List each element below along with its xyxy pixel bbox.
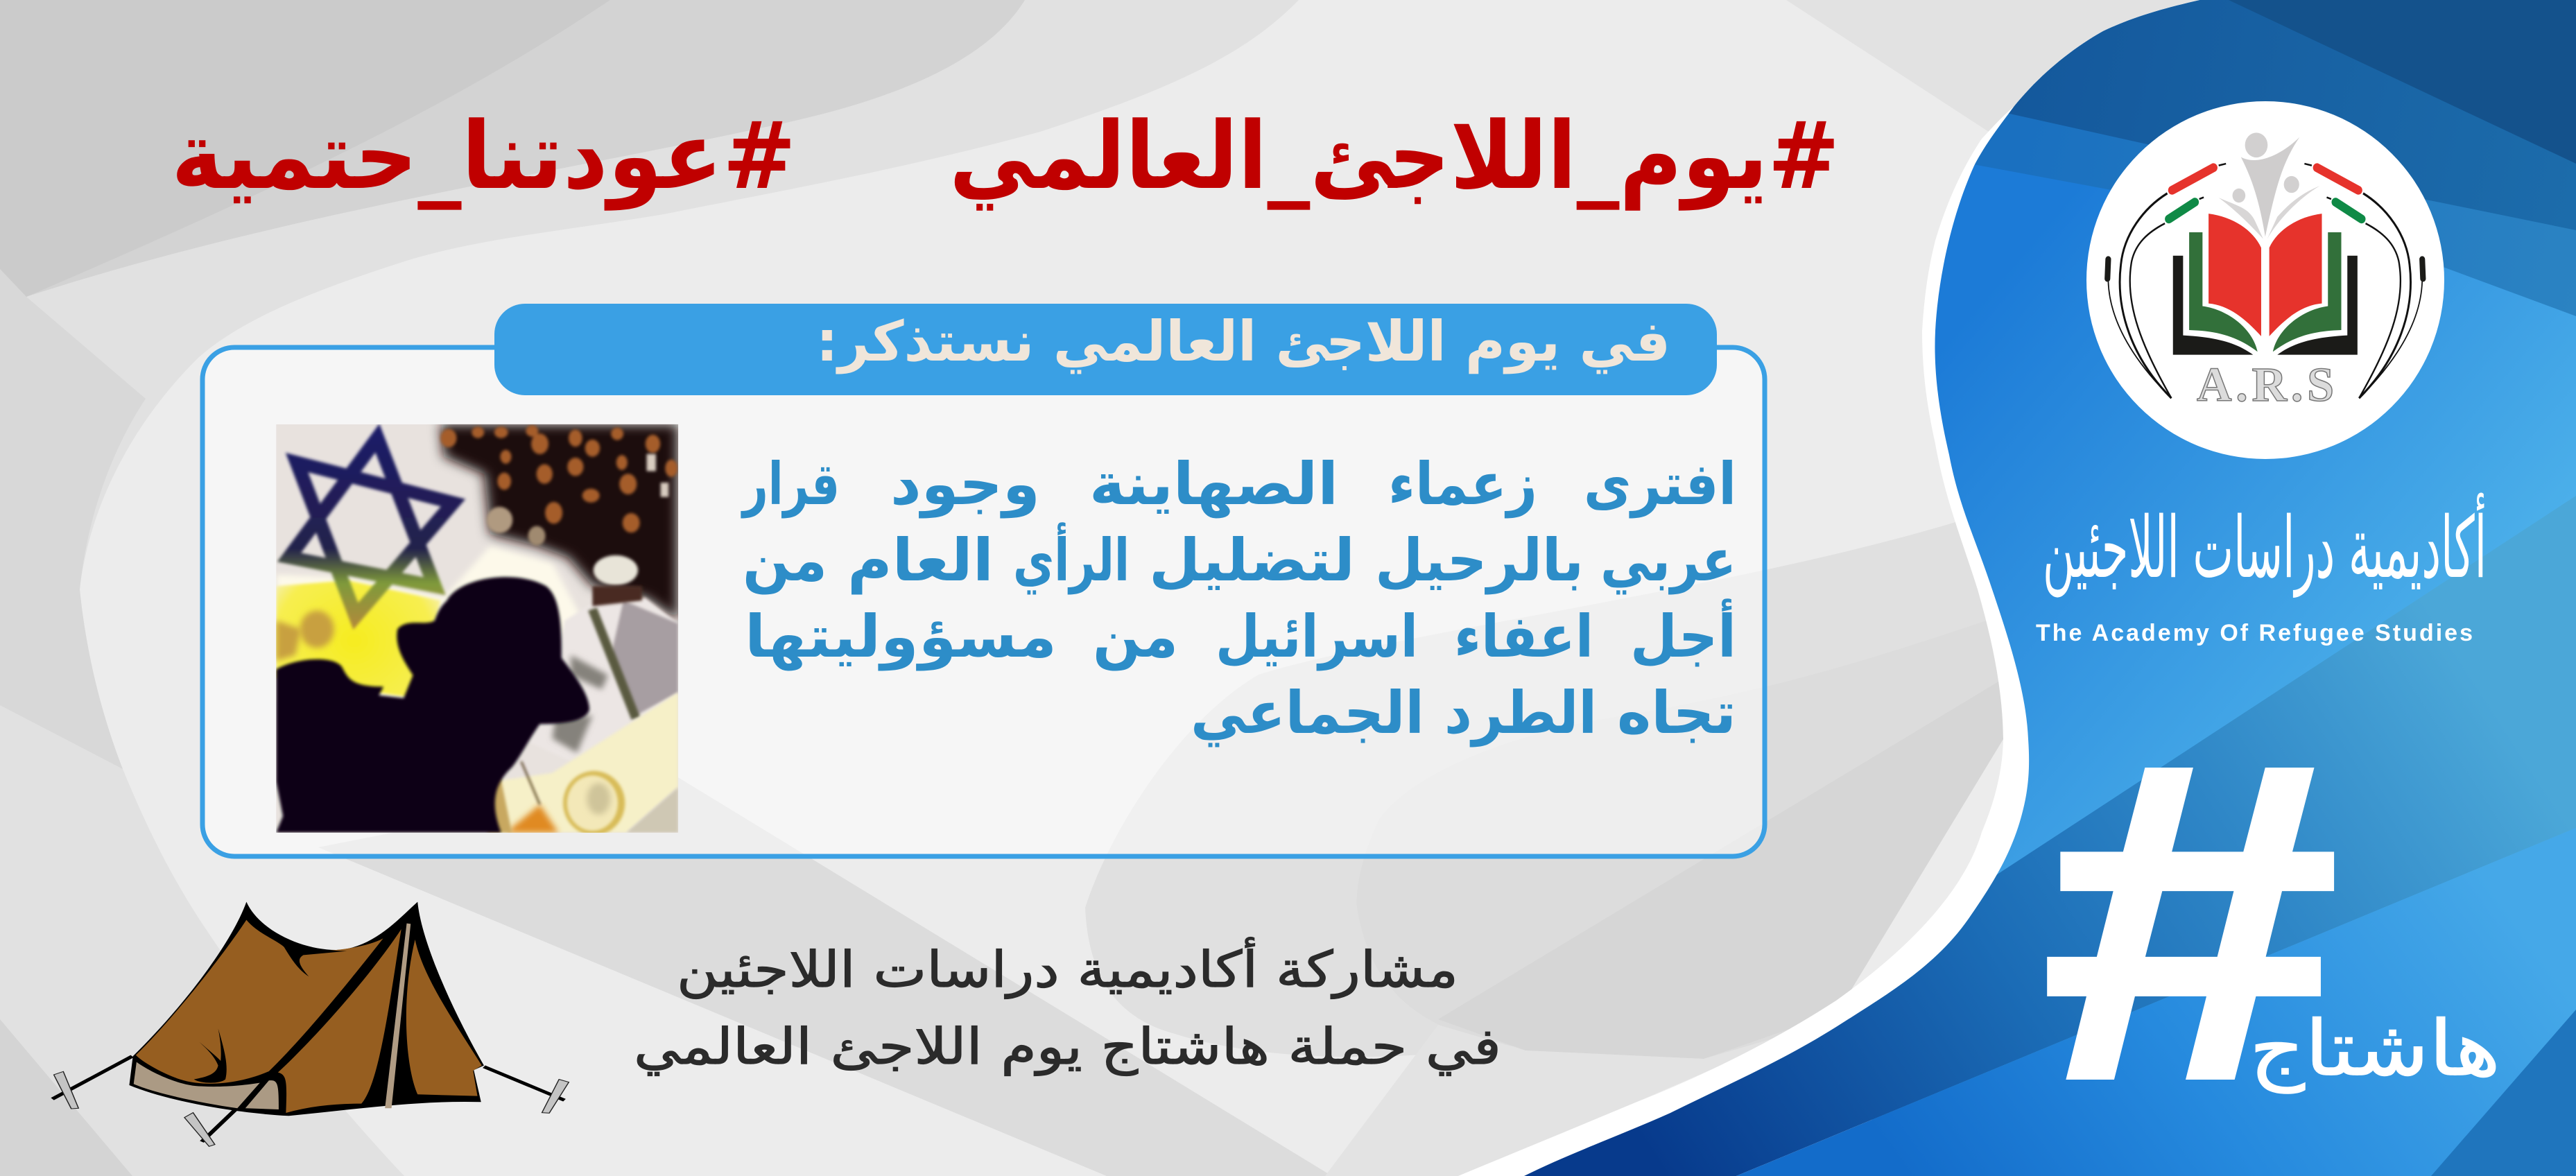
tent floor xyxy=(134,1062,279,1109)
hashtag word: هاشتاج xyxy=(2249,1004,2500,1093)
title: world refugee day hashtag: ‏#يوم_اللاجئ_العالمي xyxy=(949,102,1840,211)
body text: وجود xyxy=(890,450,1040,519)
body text: من xyxy=(743,526,827,595)
white ribbon xyxy=(1458,0,2576,1176)
guy ropes xyxy=(53,1056,564,1142)
illustration: star of david with silhouettes and crowd xyxy=(276,424,678,836)
logo disc xyxy=(2086,101,2444,459)
panel heading pill xyxy=(494,304,1717,395)
body text: لتضليل xyxy=(1149,526,1355,594)
body text: اعفاء xyxy=(1454,603,1593,671)
tent pegs xyxy=(54,1071,569,1146)
body text: قرار xyxy=(741,450,840,519)
academy name: english: The Academy Of Refugee Studies xyxy=(2036,620,2473,646)
body text: اسرائيل xyxy=(1216,603,1418,671)
body text: الصهاينة xyxy=(1089,450,1338,519)
body text: أجل xyxy=(1630,598,1736,671)
body text: زعماء xyxy=(1388,450,1537,519)
panel frame xyxy=(202,347,1765,856)
body text: تجاه xyxy=(1617,679,1736,747)
statement line two: في حملة هاشتاج يوم اللاجئ العالمي xyxy=(634,1017,1501,1076)
body text: من xyxy=(1093,603,1178,671)
tent illustration xyxy=(53,902,569,1146)
tent pole xyxy=(385,924,410,1108)
body text: العام xyxy=(847,526,994,595)
canvas creases xyxy=(194,943,347,1083)
closing statement xyxy=(634,937,1501,1076)
body text: الرأي xyxy=(1013,522,1130,595)
panel heading text: ‏في يوم اللاجئ العالمي نستذكر:‏ xyxy=(816,309,1670,374)
body text: عربي xyxy=(1600,526,1736,595)
body text xyxy=(741,450,1736,747)
panel: remembrance card xyxy=(202,304,1765,856)
tent canvas xyxy=(136,920,482,1113)
logo emblem: open book, reeds and figures xyxy=(2107,132,2423,398)
title: our return is inevitable hashtag: ‏#عودتنا_حتمية xyxy=(171,102,796,211)
blue side panel xyxy=(1456,0,2576,1176)
body text: الجماعي xyxy=(1191,679,1424,747)
hashtag symbol: # xyxy=(2042,671,2339,1171)
body text: مسؤوليتها xyxy=(745,603,1057,671)
body text: الطرد xyxy=(1444,679,1597,747)
statement line one: مشاركة أكاديمية دراسات اللاجئين xyxy=(677,937,1458,999)
tent outline xyxy=(129,902,484,1116)
body text: بالرحيل xyxy=(1375,526,1584,595)
logo initials: A.R.S xyxy=(2197,358,2334,412)
body text: افترى xyxy=(1584,450,1736,519)
logo: circle badge xyxy=(2086,101,2444,459)
